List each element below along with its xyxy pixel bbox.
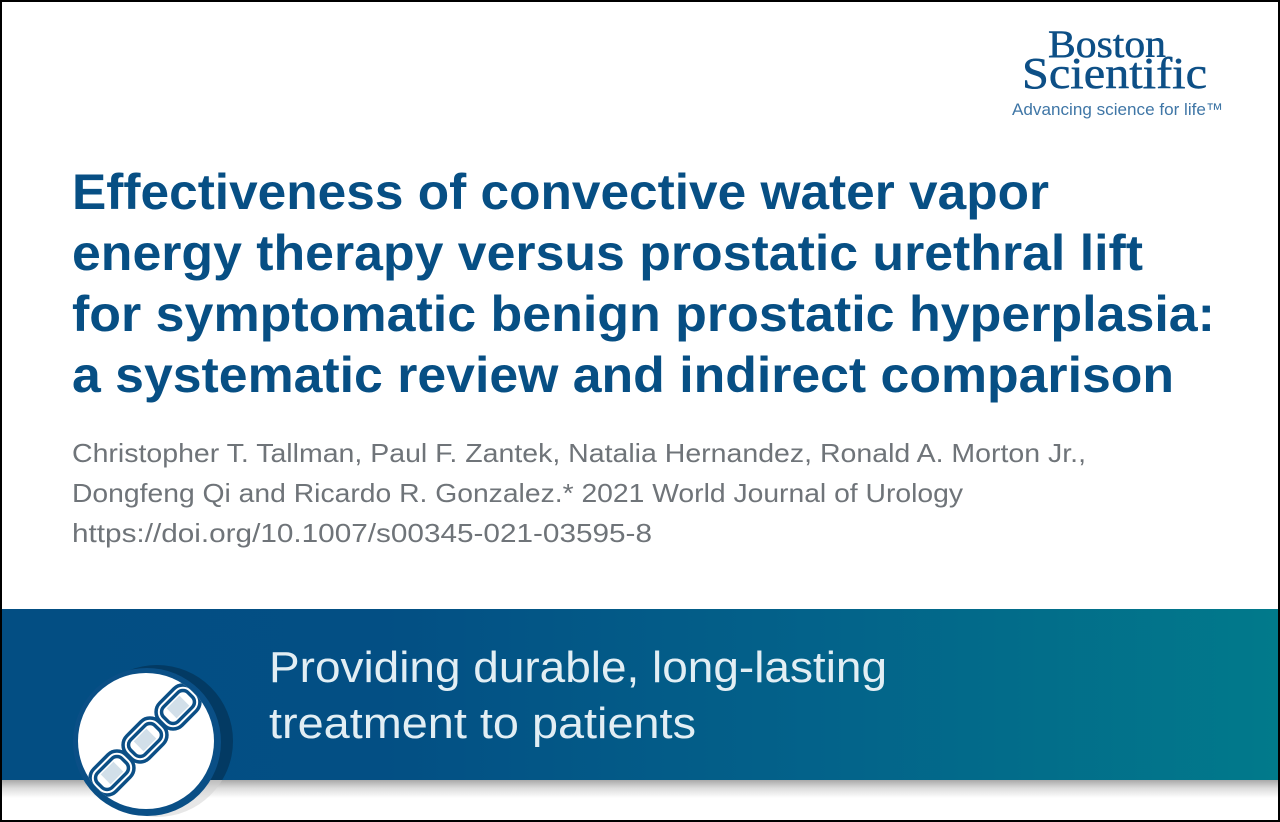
title: a systematic review and indirect comparison	[72, 347, 1174, 403]
icon: chain in circle	[73, 665, 233, 817]
authors and citation: Dongfeng Qi and Ricardo R. Gonzalez.* 2021 World Journal of Urology	[72, 478, 963, 508]
title: Effectiveness of convective water vapor	[72, 164, 1049, 220]
logo: Boston Scientific: Advancing science for life™	[1012, 100, 1223, 119]
authors and citation	[72, 438, 1086, 548]
authors and citation: https://doi.org/10.1007/s00345-021-03595-8	[72, 518, 652, 548]
banner	[0, 609, 1280, 798]
title	[72, 164, 1215, 403]
authors and citation: Christopher T. Tallman, Paul F. Zantek, Natalia Hernandez, Ronald A. Morton Jr.,	[72, 438, 1086, 468]
title: energy therapy versus prostatic urethral lift	[72, 225, 1143, 281]
logo: Boston Scientific: Boston	[1048, 23, 1166, 66]
banner heading: treatment to patients	[269, 699, 696, 748]
logo: Boston Scientific	[1012, 23, 1223, 119]
title: for symptomatic benign prostatic hyperplasia:	[72, 286, 1215, 342]
banner heading	[269, 643, 887, 748]
logo: Boston Scientific: Scientific	[1022, 49, 1207, 98]
banner heading: Providing durable, long-lasting	[269, 643, 887, 692]
